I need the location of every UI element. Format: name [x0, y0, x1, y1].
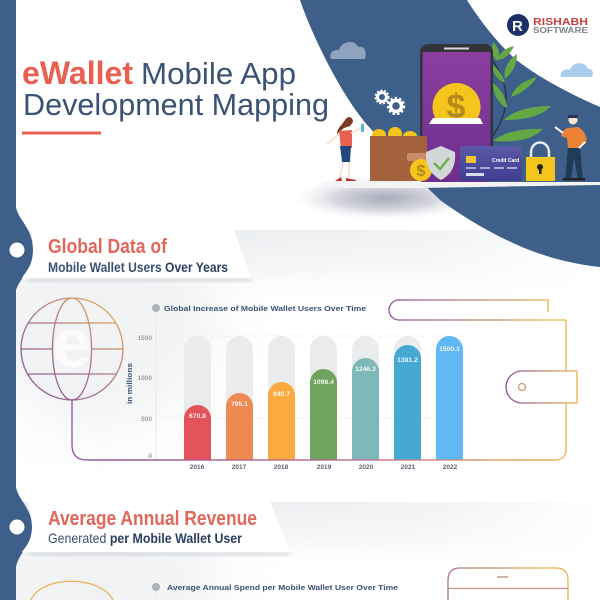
bar chart: mobile wallet users: 1246.3: [355, 366, 376, 373]
logo: SOFTWARE: [533, 26, 589, 35]
bar chart: mobile wallet users: 1500.1: [439, 346, 460, 353]
icon: globe with e: [21, 298, 123, 400]
title: Development Mapping: [23, 87, 329, 122]
panel: global data background: [16, 230, 600, 470]
header blue arc background: [300, 0, 600, 267]
bar chart: mobile wallet users: 2021: [401, 464, 416, 471]
icon: credit card: Credit Card: [492, 158, 519, 164]
wallet outline line: [72, 300, 577, 460]
bar chart: mobile wallet users: 1098.4: [313, 379, 334, 386]
icon: wallet with coins: $: [417, 163, 426, 180]
heading ribbon: revenue: Average Annual Revenue: [48, 508, 257, 530]
bar chart: mobile wallet users: 500: [141, 416, 152, 423]
bar chart: mobile wallet users: 0: [148, 453, 152, 460]
icon: phone outline: [448, 568, 568, 600]
panel: revenue background: [16, 502, 600, 600]
logo: RISHABH: [533, 16, 588, 28]
icon: padlock: [526, 142, 555, 181]
title: Mobile App: [141, 56, 296, 91]
bar chart: mobile wallet users: 670.8: [189, 413, 206, 420]
bar chart: mobile wallet users: 2019: [317, 464, 332, 471]
icon: gray cloud: [330, 42, 366, 59]
bar chart: mobile wallet users: 1381.2: [397, 357, 418, 364]
bar chart: mobile wallet users: 2022: [443, 464, 458, 471]
icon: smartphone with coin: [420, 44, 493, 182]
icon: smartphone with coin: $: [447, 88, 466, 126]
bar chart: mobile wallet users: 795.1: [231, 401, 248, 408]
chart title: average annual spend: [152, 583, 398, 600]
bar chart: mobile wallet users: 2016: [190, 464, 205, 471]
icon: gears: [376, 90, 404, 114]
bar chart: mobile wallet users: [87, 312, 555, 471]
logo: [507, 14, 589, 36]
logo: R: [512, 18, 523, 35]
title: eWallet: [22, 55, 133, 91]
chart title: average annual spend: Average Annual Spend per Mobile Wallet User Over Time: [167, 583, 398, 592]
icon: credit card: [460, 146, 522, 181]
title: [22, 55, 329, 122]
heading ribbon: revenue: [22, 502, 290, 556]
icon: shield: [426, 146, 455, 180]
icon: coin outline: [31, 581, 113, 600]
heading ribbon: global data: [22, 230, 252, 282]
icon: light cloud: [561, 63, 593, 77]
bar chart: mobile wallet users: 2020: [359, 464, 374, 471]
bar chart: mobile wallet users: 2018: [274, 464, 289, 471]
heading ribbon: global data: Mobile Wallet Users Over Years: [48, 259, 228, 275]
bar chart: mobile wallet users: 1500: [138, 335, 152, 342]
left binder strip with holes: [0, 0, 33, 600]
icon: woman figure: [327, 117, 364, 181]
bar chart: mobile wallet users: 940.7: [273, 391, 290, 398]
icon: man figure: [555, 115, 587, 180]
title underline: [22, 132, 101, 134]
platform shelf: [320, 182, 600, 188]
bar chart: mobile wallet users: 2017: [232, 464, 247, 471]
chart title: global increase: Global Increase of Mobile Wallet Users Over Time: [164, 304, 366, 313]
heading ribbon: global data: Global Data of: [48, 236, 167, 258]
bar chart: mobile wallet users: in millions: [125, 363, 134, 404]
icon: wallet with coins: [370, 127, 432, 181]
icon: plant: [490, 42, 551, 141]
platform shadow: [285, 174, 485, 222]
bar chart: mobile wallet users: 1000: [138, 375, 152, 382]
heading ribbon: revenue: Generated per Mobile Wallet User: [48, 530, 242, 546]
icon: globe with e: e: [53, 304, 91, 382]
